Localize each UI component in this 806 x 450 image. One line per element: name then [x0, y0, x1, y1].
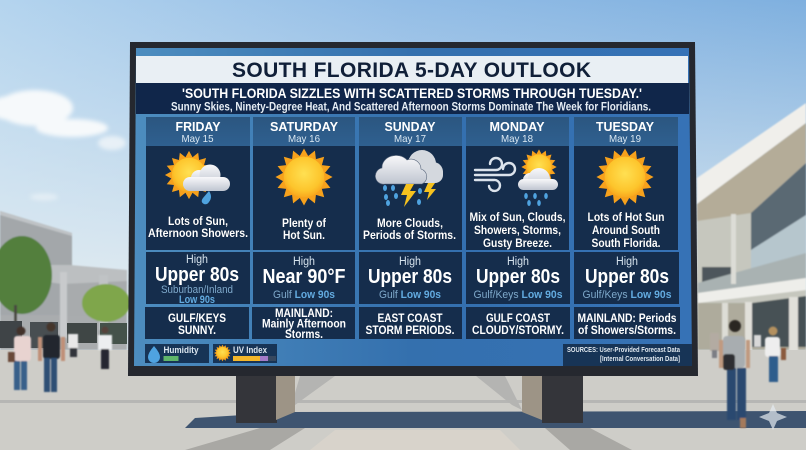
Monday day header: MONDAY — [490, 119, 545, 134]
Monday note: GULF COAST — [486, 311, 551, 325]
Monday forecast cell: Gusty Breeze. — [483, 236, 552, 250]
Friday temperature: Upper 80s — [155, 264, 239, 286]
Saturday forecast cell: Plenty of — [282, 216, 327, 230]
Sunday note — [359, 307, 462, 339]
Tuesday forecast cell: South Florida. — [592, 236, 660, 250]
Sunday note: STORM PERIODS. — [366, 323, 454, 337]
Sunday forecast cell: More Clouds, — [377, 216, 443, 230]
sources box: SOURCES: User-Provided Forecast Data — [567, 345, 681, 354]
billboard blue panel — [134, 48, 692, 366]
sources box — [563, 344, 692, 366]
title bar: SOUTH FLORIDA 5-DAY OUTLOOK — [232, 59, 591, 82]
legend: UV index — [213, 344, 277, 363]
Friday day header — [146, 117, 250, 146]
title bar — [136, 56, 688, 83]
Friday day header: FRIDAY — [176, 119, 221, 134]
billboard shadow — [185, 411, 806, 428]
Friday forecast cell: Afternoon Showers. — [148, 226, 248, 240]
Saturday note — [252, 306, 355, 341]
icon: sun — [596, 148, 654, 206]
Tuesday day header: TUESDAY — [596, 119, 654, 134]
icon: wind, sun, cloud and rain — [475, 149, 558, 206]
Tuesday temperature — [574, 252, 679, 304]
panel: Monday — [466, 117, 570, 339]
Tuesday forecast cell — [574, 146, 678, 250]
Tuesday note: of Showers/Storms. — [578, 323, 676, 337]
Saturday note: MAINLAND: — [275, 306, 333, 320]
Saturday day header — [253, 117, 355, 146]
icon: UV sun — [214, 345, 231, 361]
Saturday day header: May 16 — [288, 133, 320, 145]
Sunday note: EAST COAST — [378, 311, 443, 325]
legend: humidity: Humidity — [164, 345, 198, 355]
icon: watermark sparkle — [759, 404, 787, 430]
Saturday note: Mainly Afternoon — [262, 316, 346, 330]
legend: humidity — [145, 344, 209, 363]
headline band: 'SOUTH FLORIDA SIZZLES WITH SCATTERED STORMS THROUGH TUESDAY.' — [182, 85, 642, 101]
Friday forecast cell: Lots of Sun, — [168, 214, 228, 228]
Saturday forecast cell — [253, 146, 355, 250]
Saturday note: Storms. — [285, 327, 323, 341]
billboard frame — [128, 42, 698, 376]
Tuesday day header — [574, 117, 678, 146]
Monday forecast cell — [466, 146, 569, 250]
Tuesday note — [574, 307, 680, 339]
Friday note: SUNNY. — [178, 323, 216, 337]
Sunday day header: SUNDAY — [384, 119, 436, 134]
Friday note — [145, 307, 249, 339]
icon: sun — [275, 148, 333, 206]
panel: Tuesday — [574, 117, 680, 339]
Tuesday day header: May 19 — [609, 133, 641, 145]
Friday temperature: Suburban/Inland — [161, 284, 233, 296]
Monday day header: May 18 — [501, 133, 533, 145]
Sunday temperature: Gulf Low 90s — [379, 289, 441, 301]
background: clouds — [0, 90, 126, 200]
Sunday day header — [359, 117, 462, 146]
Saturday temperature: Near 90°F — [262, 266, 346, 288]
Saturday day header: SATURDAY — [270, 119, 338, 134]
Saturday temperature: Gulf Low 90s — [273, 289, 335, 301]
background: right building — [697, 103, 806, 352]
Monday temperature: Upper 80s — [476, 266, 560, 288]
Sunday forecast cell — [359, 146, 462, 250]
Friday note: GULF/KEYS — [168, 311, 226, 325]
UV scale bar — [233, 356, 276, 361]
people: left group — [8, 322, 112, 392]
icon: water drop — [148, 346, 160, 363]
people: right group — [710, 320, 786, 428]
Sunday temperature — [359, 252, 462, 304]
headline band — [136, 83, 689, 114]
Monday temperature: High — [507, 256, 529, 268]
billboard left leg — [236, 374, 295, 423]
Tuesday note: MAINLAND: Periods — [578, 311, 677, 325]
background: left building windows — [0, 321, 127, 348]
Tuesday forecast cell: Lots of Hot Sun — [588, 210, 664, 224]
panel: Friday — [145, 117, 250, 339]
Sunday forecast cell: Periods of Storms. — [363, 228, 456, 242]
Monday forecast cell: Showers, Storms, — [474, 223, 561, 237]
Sunday temperature: High — [399, 256, 421, 268]
Sunday temperature: Upper 80s — [368, 266, 452, 288]
Sunday day header: May 17 — [394, 133, 426, 145]
icon: sun with cloud and drop — [165, 151, 230, 204]
Saturday temperature — [253, 252, 355, 304]
Tuesday temperature: High — [616, 256, 638, 268]
Monday note: CLOUDY/STORMY. — [472, 323, 564, 337]
background: left building — [0, 211, 130, 350]
Monday note — [466, 307, 570, 339]
panel: Saturday — [252, 117, 355, 341]
Monday temperature — [466, 252, 570, 304]
Friday temperature — [146, 252, 250, 306]
Saturday temperature: High — [293, 256, 315, 268]
Tuesday forecast cell: Around South — [592, 223, 660, 237]
legend: UV index: UV Index — [233, 345, 267, 355]
background: plaza pavement — [0, 350, 806, 450]
Friday temperature: Low 90s — [179, 294, 215, 306]
Tuesday temperature: Gulf/Keys Low 90s — [582, 289, 672, 301]
Friday forecast cell — [146, 146, 250, 250]
background: sky — [0, 0, 806, 360]
Friday temperature: High — [186, 254, 208, 266]
Saturday forecast cell: Hot Sun. — [283, 228, 325, 242]
Monday forecast cell: Mix of Sun, Clouds, — [470, 210, 566, 224]
Tuesday temperature: Upper 80s — [585, 266, 669, 288]
sources box: [Internal Conversation Data] — [600, 354, 680, 363]
Monday day header — [466, 117, 569, 146]
icon: storm clouds — [375, 150, 443, 207]
Friday day header: May 15 — [182, 133, 214, 145]
panel: Sunday — [359, 117, 462, 339]
Monday temperature: Gulf/Keys Low 90s — [474, 289, 562, 301]
headline band: Sunny Skies, Ninety-Degree Heat, And Scattered Afternoon Storms Dominate The Week for Floridians. — [171, 102, 651, 114]
billboard right leg — [522, 374, 583, 423]
